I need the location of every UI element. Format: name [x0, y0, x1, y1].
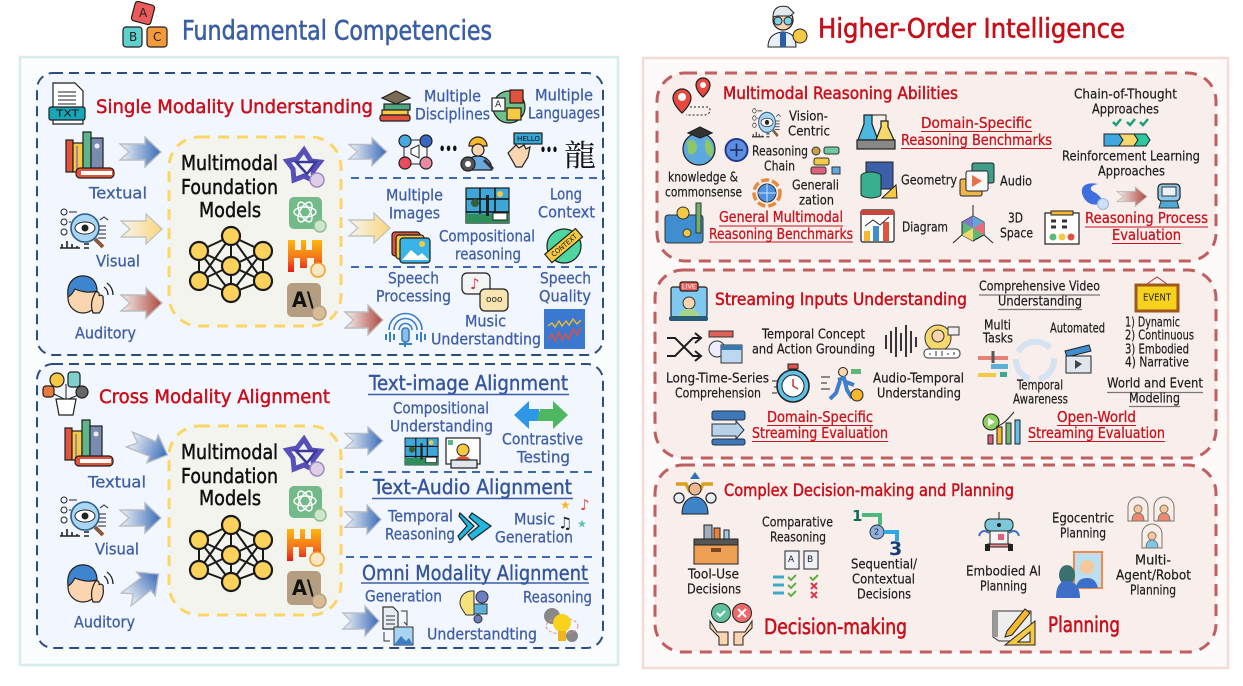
text: Domain-Specific Streaming Evaluation: Domain-Specific [767, 408, 873, 426]
icon: DeepSeek whale [1082, 183, 1108, 210]
heading: Omni Modality Alignment: Omni Modality Alignment [362, 561, 588, 585]
panel: fundamental competencies [20, 1, 618, 665]
dots: ••• [439, 140, 458, 158]
icon: A B comparison checklist: A [788, 555, 795, 565]
text: Comparative Reasoning [762, 516, 833, 546]
text: Music Generation: Music [514, 510, 555, 528]
text: Reinforcement Learning Approaches: Approaches [1098, 164, 1165, 180]
text: Domain-Specific Streaming Evaluation [752, 408, 888, 442]
panel: complex decision-making and planning [655, 465, 1216, 652]
text: Multimodal Foundation Models: Models [199, 486, 261, 510]
text: Tool-Use Decisions: Decisions [687, 582, 741, 598]
icon: blueprint [665, 203, 703, 243]
arrow: audio output [345, 305, 383, 335]
text: Multi-Agent/Robot Planning [1116, 554, 1191, 598]
icon: toolbox [694, 525, 738, 564]
text: Embodied AI Planning: Embodied AI [966, 564, 1041, 580]
text: Reasoning Process Evaluation: Reasoning Process [1085, 209, 1208, 227]
text: Multiple Disciplines: Disciplines [415, 104, 490, 124]
text: Audio-Temporal Understanding [873, 372, 964, 402]
icon: Qwen logo [287, 150, 324, 187]
icon: check and cross in hands [710, 604, 752, 645]
icon: textual books [66, 132, 114, 178]
icon: Anthropic logo [287, 283, 326, 320]
text: knowledge & commonsense: commonsense [665, 186, 742, 200]
list: event modeling properties [1125, 316, 1194, 370]
label: Visual: Visual [96, 252, 140, 270]
arrow: auditory to models [117, 562, 168, 611]
icon: shuffle arrows [667, 333, 701, 361]
text: Multi-Agent/Robot Planning: Agent/Robot [1116, 568, 1191, 584]
arrow: visual output [349, 213, 390, 243]
text: Multimodal Foundation Models: Models [199, 198, 261, 222]
icon: audio waveform [886, 325, 916, 357]
text: Audio-Temporal Understanding: Audio-Temporal [873, 372, 964, 386]
text: Temporal Reasoning: Reasoning [385, 524, 455, 544]
arrow: auditory input [121, 288, 162, 318]
icon: music notes and stars [558, 496, 590, 532]
text: Multi-Agent/Robot Planning: Planning [1130, 584, 1176, 598]
icon: plus circle [726, 139, 748, 161]
text: Multiple Images: Multiple [386, 186, 443, 204]
icon: flow chain [811, 147, 840, 174]
icon: visual eye [60, 209, 108, 248]
icon: city image grid [466, 188, 509, 223]
icon: diagram chart [861, 210, 894, 242]
icon: steps 1 2 3: 1 [852, 507, 862, 525]
text: Long-Time-Series Comprehension: Long-Time-Series [666, 372, 769, 386]
icon: running person [821, 368, 863, 401]
icon: contrastive arrows [514, 401, 568, 429]
icon: clock and calendar [709, 331, 742, 363]
text: Domain-Specific Streaming Evaluation: Streaming Evaluation [752, 424, 888, 442]
text: Compositional reasoning: Compositional [439, 226, 535, 246]
text: Open-World Streaming Evaluation [1028, 408, 1165, 442]
heading: Single Modality Understanding: Single Modality Understanding [96, 96, 373, 118]
icon: steps 1 2 3: 3 [889, 538, 902, 560]
text: Music Understandting: Understandting [431, 330, 541, 348]
text: Contrastive Testing: Contrastive [502, 430, 583, 448]
arrow: whale to robot [1117, 187, 1147, 206]
text: General Multimodal Reasoning Benchmarks: Reasoning Benchmarks [709, 225, 853, 243]
icon: worker with gear [461, 137, 493, 171]
arrow: visual input [121, 214, 162, 244]
text: Comprehensive Video Understanding: Understanding [998, 294, 1082, 310]
text: Speech Quality [539, 268, 591, 306]
panel: multimodal reasoning abilities [657, 73, 1216, 261]
panel: higher-order intelligence [643, 6, 1228, 668]
heading: Decision-making: Decision-making [764, 615, 907, 639]
icon: event sign [1136, 277, 1178, 311]
heading: Planning: Planning [1048, 613, 1120, 637]
icon: gantt bars [978, 351, 1008, 377]
text: Multimodal Foundation Models: Multimodal [181, 151, 278, 175]
text: Contrastive Testing [502, 430, 583, 466]
text: Multiple Images [386, 186, 443, 222]
icon: Anthropic logo [287, 571, 326, 608]
text: Long-Time-Series Comprehension [666, 372, 769, 402]
text: Multi Tasks: Tasks [982, 332, 1013, 346]
icon: visual eye [60, 497, 108, 536]
arrow: visual to models [120, 503, 161, 533]
label: Auditory: Auditory [75, 324, 136, 342]
icon: music notes and stars: ★ [560, 498, 571, 512]
text: Comparative Reasoning: Comparative [762, 516, 833, 530]
title icon: scientist [768, 6, 807, 47]
text: Music Generation [495, 510, 573, 546]
text: Speech Processing: Speech [388, 268, 439, 288]
text: World and Event Modeling: World and Event [1107, 376, 1203, 392]
text: Temporal Reasoning [385, 506, 455, 544]
icon: Mistral logo [287, 529, 324, 566]
icon: decision arrows over person [674, 472, 716, 514]
text: Long Context: Context [538, 202, 595, 222]
text: Compositional Understanding [390, 398, 493, 436]
text: Multi Tasks: Multi [984, 318, 1011, 334]
label: Textual: Textual [88, 184, 147, 202]
text: Multi Tasks [982, 318, 1013, 346]
arrow: textual to models [124, 426, 173, 469]
text: General Multimodal Reasoning Benchmarks [709, 208, 853, 243]
icon: globe with cap [683, 127, 715, 165]
list: event modeling properties: 1) Dynamic [1125, 316, 1180, 330]
chart: speech quality waveform [544, 309, 585, 349]
panel: streaming inputs understanding [655, 270, 1216, 458]
icon: ChatGPT logo [289, 197, 326, 232]
text: Tool-Use Decisions: Tool-Use [687, 568, 739, 582]
text: Reasoning Process Evaluation: Evaluation [1112, 226, 1181, 244]
label: Visual: Visual [95, 540, 139, 558]
icon: neural network [190, 516, 272, 591]
title icon: ABC blocks: C [153, 30, 161, 44]
text: 3D Space: Space [1000, 226, 1033, 242]
icon: embodied robot [979, 512, 1019, 551]
text: Multimodal Foundation Models [181, 440, 278, 510]
icon: hello waving hand: HELLO [517, 135, 540, 143]
heading: Multimodal Reasoning Abilities: Multimodal Reasoning Abilities [723, 84, 958, 104]
text: Reinforcement Learning Approaches [1062, 150, 1200, 180]
text: Multiple Disciplines: Multiple [424, 86, 481, 106]
text: Multi-Agent/Robot Planning: Multi- [1135, 554, 1171, 568]
text: Embodied AI Planning: Planning [980, 580, 1027, 594]
text: Music Generation: Generation [495, 528, 573, 546]
text: Sequential/Contextual Decisions: Sequential/ [851, 558, 918, 572]
icon: live stream laptop [669, 282, 708, 321]
text: Comprehensive Video Understanding: Comprehensive Video [979, 280, 1100, 294]
text: Chain-of-Thought Approaches: Approaches [1092, 102, 1159, 118]
text: Multimodal Foundation Models: Multimodal [181, 440, 278, 464]
icon: audio media player [960, 163, 994, 196]
arrow: omni [343, 606, 379, 636]
text: Compositional reasoning [439, 226, 535, 264]
text: Sequential/Contextual Decisions [851, 558, 918, 602]
icon: context tag [545, 229, 583, 263]
text: Vision-Centric [788, 110, 830, 140]
text: Domain-Specific Reasoning Benchmarks [901, 114, 1052, 149]
text: knowledge & commonsense: knowledge & [668, 170, 738, 186]
text: Chain-of-Thought Approaches: Chain-of-Thought [1074, 88, 1177, 102]
text: Speech Processing [376, 268, 451, 306]
text: Multiple Languages: Multiple [535, 86, 593, 104]
text: Egocentric Planning: Egocentric [1052, 512, 1114, 526]
text: Speech Quality: Quality [539, 286, 591, 306]
arrow: textual output [349, 138, 387, 166]
icon: auditory ear [68, 276, 113, 313]
icon: event sign: EVENT [1143, 292, 1172, 304]
text: Temporal Awareness [1013, 378, 1068, 408]
icon: 3D axes [953, 205, 993, 243]
title icon: ABC blocks: A [139, 6, 148, 20]
text: Compositional reasoning: reasoning [455, 244, 521, 264]
icon: graduation cap on books [380, 91, 410, 121]
text: Chain-of-Thought Approaches [1074, 88, 1177, 118]
text: Contrastive Testing: Testing [516, 448, 570, 466]
text: Long Context [538, 184, 595, 222]
icon: city image [405, 438, 438, 465]
icon: lightbulb with gears [544, 608, 578, 642]
icon: Qwen logo [287, 439, 324, 476]
list: event modeling properties: 2) Continuous [1125, 328, 1194, 344]
icon: music notes and stars: ★ [577, 518, 587, 530]
icon: temporal cycle arrows [1016, 342, 1054, 379]
icon: multi-agent people [1128, 497, 1174, 548]
label: Textual: Textual [87, 472, 146, 492]
arrow: text-image [345, 427, 383, 455]
icon: understanding bulb and gears [460, 591, 488, 623]
icon: fast forward chevrons [458, 513, 491, 540]
icon: speaking person audio [924, 325, 960, 358]
icon: steps 1 2 3 [852, 507, 902, 560]
text: Egocentric Planning: Planning [1060, 526, 1106, 542]
text: Multiple Languages [528, 86, 600, 122]
text: Reinforcement Learning Approaches: Reinforcement Learning [1062, 150, 1200, 164]
arrow: text-audio [345, 505, 381, 534]
icon: textual books [65, 420, 113, 466]
text: Generalization: Generali [792, 178, 839, 194]
text: Sequential/Contextual Decisions: Contextual [852, 572, 915, 588]
icon: podcast microphone [386, 314, 425, 347]
text: Generalization [792, 178, 839, 208]
arrow: textual input [120, 137, 161, 167]
icon: A B comparison checklist: B [807, 555, 813, 565]
icon: clapperboard [1065, 345, 1091, 373]
text: Compositional Understanding: Compositional [393, 398, 489, 418]
text: Speech Quality: Speech [540, 268, 591, 288]
text: Temporal Concept and Action Grounding [752, 328, 875, 358]
heading: Text-Audio Alignment: Text-Audio Alignment [372, 475, 572, 499]
title icon: ABC blocks: B [129, 30, 137, 44]
text: 3D Space [1000, 212, 1033, 242]
text: Multimodal Foundation Models: Foundation [181, 464, 278, 488]
glyph: dragon: 龍 [564, 131, 596, 175]
icon: evaluation checklist [1045, 211, 1079, 244]
icon: TXT document: TXT [55, 108, 80, 120]
text: Temporal Concept and Action Grounding: and Action Grounding [752, 342, 875, 358]
text: Audio-Temporal Understanding: Understanding [877, 386, 961, 402]
text: Open-World Streaming Evaluation: Streaming Evaluation [1028, 424, 1165, 442]
text: Reasoning Chain [752, 144, 808, 174]
list: event modeling properties: 4) Narrative [1125, 356, 1189, 370]
title: Fundamental Competencies: Fundamental Competencies [182, 16, 492, 46]
heading: Text-image Alignment: Text-image Alignment [368, 371, 568, 395]
text: Temporal Concept and Action Grounding: Temporal Concept [761, 328, 865, 342]
icon: music chat bubbles: ♪ [470, 275, 480, 293]
text: Domain-Specific Reasoning Benchmarks: Domain-Specific [921, 114, 1032, 132]
text: Temporal Awareness: Awareness [1013, 392, 1068, 408]
text: World and Event Modeling [1107, 376, 1203, 406]
icon: language globe [492, 90, 525, 123]
text: Reasoning: Reasoning [523, 588, 592, 606]
text: Tool-Use Decisions [687, 568, 741, 598]
text: Embodied AI Planning [966, 564, 1041, 594]
text: Vision-Centric: Centric [788, 124, 830, 140]
text: World and Event Modeling: Modeling [1129, 392, 1180, 406]
icon: planning blueprint with pencil [993, 609, 1035, 645]
icon: ChatGPT logo [289, 486, 326, 521]
text: Generation: Generation [365, 586, 442, 606]
text: knowledge & commonsense [665, 170, 742, 200]
icon: robot head [1158, 184, 1180, 208]
icon: language globe: A [495, 100, 502, 110]
icon: plant with device leaves [43, 372, 88, 415]
icon: Mistral logo [288, 240, 325, 277]
icon: open-world growth chart [983, 412, 1020, 444]
icon: music notes and stars: ♪ [580, 496, 590, 514]
icon: stopwatch [772, 364, 809, 402]
title: Higher-Order Intelligence: Higher-Order Intelligence [818, 14, 1125, 44]
text: Audio: Audio [1000, 174, 1032, 190]
icon: person at mirror [1056, 552, 1102, 598]
text: Music Understandting [431, 312, 541, 348]
icon: social media network [399, 135, 432, 169]
icon: music chat bubbles [462, 273, 508, 311]
icon: context tag: CONTEXT [550, 232, 579, 259]
panel: multimodal foundation models [169, 426, 341, 615]
list: event modeling properties: 3) Embodied [1125, 342, 1189, 358]
icon: auditory ear [68, 565, 113, 602]
text: Reasoning Chain: Chain [764, 160, 795, 174]
icon: music chat bubbles: ooo [486, 295, 503, 305]
icon: neural network [190, 227, 272, 302]
text: Egocentric Planning [1052, 512, 1114, 542]
text: Reasoning Process Evaluation [1085, 209, 1208, 244]
text: Speech Processing: Processing [376, 286, 451, 306]
title icon: ABC blocks [123, 1, 167, 47]
text: Sequential/Contextual Decisions: Decisions [857, 588, 911, 602]
text: Multimodal Foundation Models: Foundation [181, 175, 278, 199]
icon: location pins [673, 78, 710, 115]
panel: multimodal foundation models [169, 137, 341, 326]
icon: document to image [383, 607, 413, 645]
icon: gear globe [754, 180, 780, 206]
text: 3D Space: 3D [1008, 212, 1023, 226]
icon: vision eye [752, 109, 781, 137]
icon: chemistry flasks [857, 115, 895, 149]
text: Music Understandting: Music [465, 312, 506, 330]
text: Comprehensive Video Understanding [979, 280, 1100, 310]
heading: Cross Modality Alignment: Cross Modality Alignment [99, 386, 330, 408]
icon: stacked images [392, 232, 430, 263]
text: Compositional Understanding: Understanding [390, 416, 493, 436]
text: Reasoning Chain: Reasoning [752, 144, 808, 160]
icon: music notes and stars: ♫ [558, 514, 572, 532]
text: General Multimodal Reasoning Benchmarks: General Multimodal [719, 208, 843, 226]
text: Multiple Languages: Languages [528, 104, 600, 122]
icon: A B comparison checklist [773, 551, 818, 598]
icon: domain streaming data [712, 411, 745, 445]
icon: hello waving hand [508, 133, 542, 167]
text: Geometry: Geometry [901, 174, 957, 188]
icon: person at screen [446, 438, 480, 468]
text: Temporal Reasoning: Temporal [387, 506, 453, 526]
label: Auditory: Auditory [74, 612, 135, 632]
icon: TXT document [49, 83, 85, 124]
text: Diagram: Diagram [902, 220, 948, 236]
dots: ••• [540, 140, 558, 160]
heading: Complex Decision-making and Planning: Complex Decision-making and Planning [724, 481, 1014, 501]
text: Domain-Specific Reasoning Benchmarks: Reasoning Benchmarks [901, 131, 1052, 149]
panel: cross modality alignment [37, 364, 603, 648]
text: Long Context: Long [550, 184, 582, 204]
text: Multimodal Foundation Models [181, 151, 278, 222]
text: Long-Time-Series Comprehension: Comprehension [675, 386, 761, 402]
heading: Streaming Inputs Understanding: Streaming Inputs Understanding [715, 290, 967, 310]
text: Open-World Streaming Evaluation: Open-World [1057, 408, 1136, 426]
icon: live stream laptop: LIVE [682, 284, 696, 290]
icon: geometry shapes [861, 162, 897, 198]
text: Temporal Awareness: Temporal [1016, 378, 1063, 394]
text: Multiple Images: Images [389, 204, 440, 222]
text: Multiple Disciplines [415, 86, 490, 124]
icon: checkmark chevrons [1104, 119, 1150, 146]
text: Understandting: Understandting [427, 624, 537, 644]
icon: steps 1 2 3: 2 [874, 528, 879, 536]
text: Generalization: zation [799, 194, 834, 208]
text: Automated: Automated [1050, 322, 1105, 336]
text: Vision-Centric: Vision- [789, 110, 828, 124]
text: Comparative Reasoning: Reasoning [770, 530, 826, 546]
panel: single modality understanding [37, 73, 605, 355]
